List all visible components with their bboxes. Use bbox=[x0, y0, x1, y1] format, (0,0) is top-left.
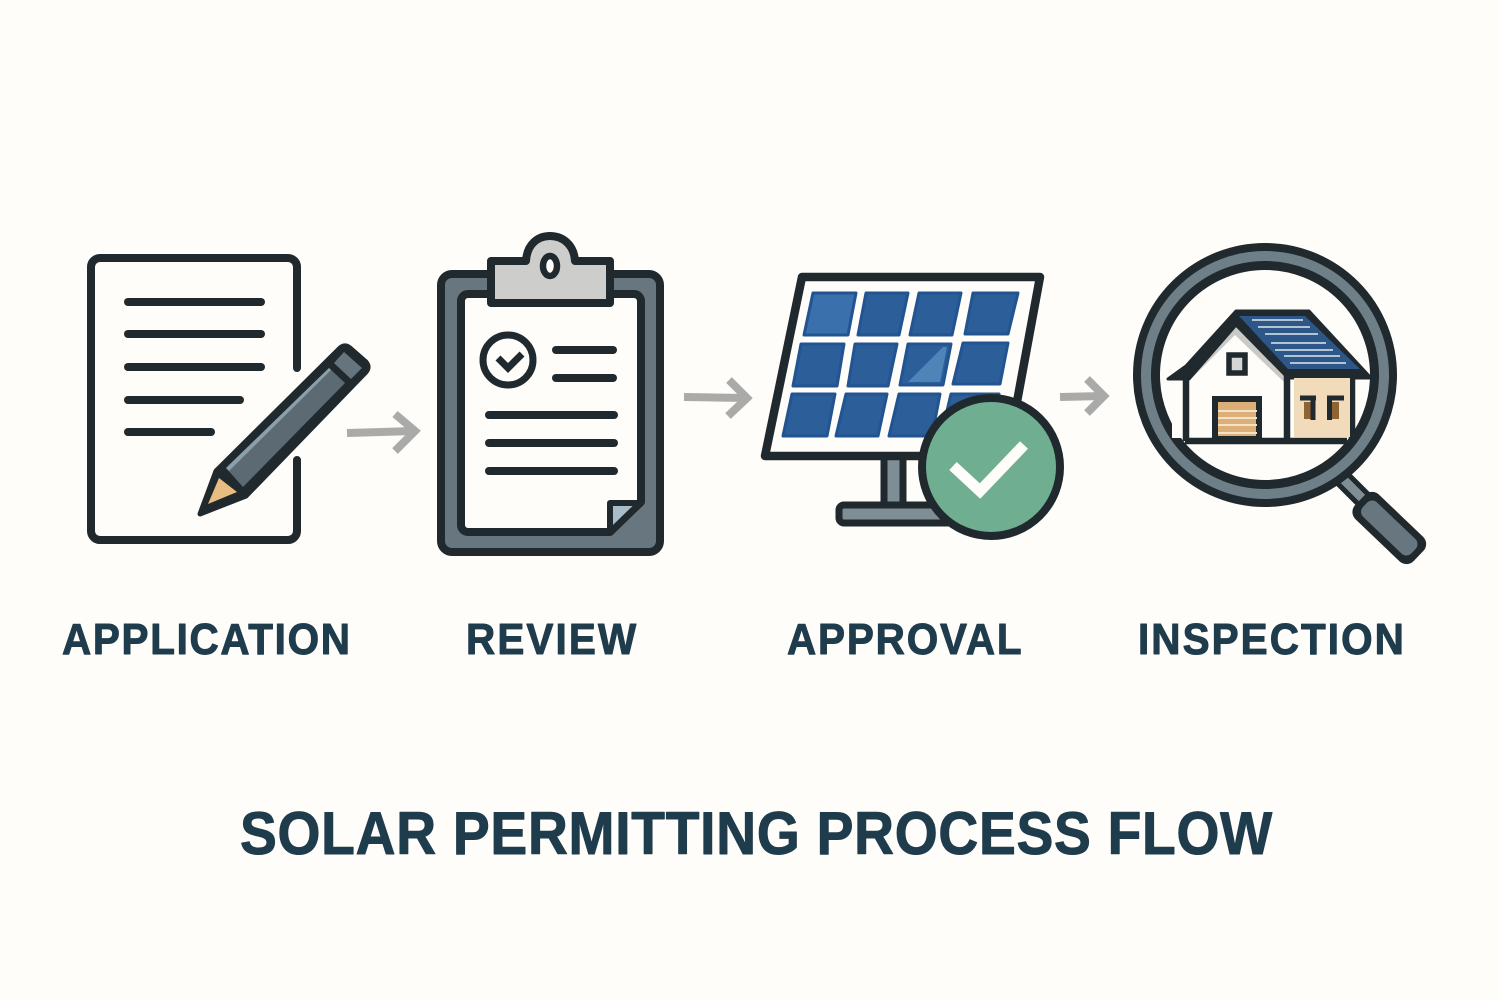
clipboard board bbox=[441, 274, 660, 552]
icon: review clipboard bbox=[441, 236, 660, 552]
document outline bbox=[91, 258, 297, 540]
tan annex bbox=[1294, 378, 1350, 437]
highlight on cell bbox=[908, 347, 947, 382]
arrow: approval to inspection bbox=[1060, 379, 1104, 413]
garage door bbox=[1215, 399, 1259, 439]
checklist lines bbox=[489, 350, 614, 471]
magnifier ring bbox=[1146, 256, 1384, 494]
paper sheet bbox=[461, 294, 641, 532]
annex windows bbox=[1304, 402, 1339, 419]
green check badge bbox=[922, 398, 1060, 536]
house window bbox=[1229, 355, 1245, 373]
icon: application document with pencil bbox=[91, 258, 368, 540]
check circle bbox=[483, 335, 533, 385]
document text lines bbox=[128, 302, 261, 432]
solar cells bbox=[783, 293, 1018, 436]
title: SOLAR PERMITTING PROCESS FLOW bbox=[240, 801, 1273, 868]
label: review: REVIEW bbox=[466, 614, 636, 663]
panel frame bbox=[765, 277, 1040, 456]
clip bbox=[491, 236, 610, 303]
icon: approved solar panel bbox=[765, 277, 1060, 536]
panel stand bbox=[839, 455, 959, 523]
house bbox=[1168, 311, 1371, 441]
label: approval: APPROVAL bbox=[787, 614, 1022, 663]
roof outline and solar roof bbox=[1168, 311, 1371, 379]
label: application: APPLICATION bbox=[62, 614, 350, 663]
magnifier handle bbox=[1342, 478, 1430, 568]
pencil bbox=[200, 346, 368, 514]
folded corner bbox=[610, 503, 640, 532]
arrow: application to review bbox=[347, 414, 415, 451]
arrow: review to approval bbox=[684, 380, 747, 416]
icon: inspection magnifier with house bbox=[1146, 256, 1430, 568]
label: inspection: INSPECTION bbox=[1138, 614, 1404, 663]
walls and ground bbox=[1185, 368, 1352, 441]
clip hole bbox=[543, 256, 557, 276]
